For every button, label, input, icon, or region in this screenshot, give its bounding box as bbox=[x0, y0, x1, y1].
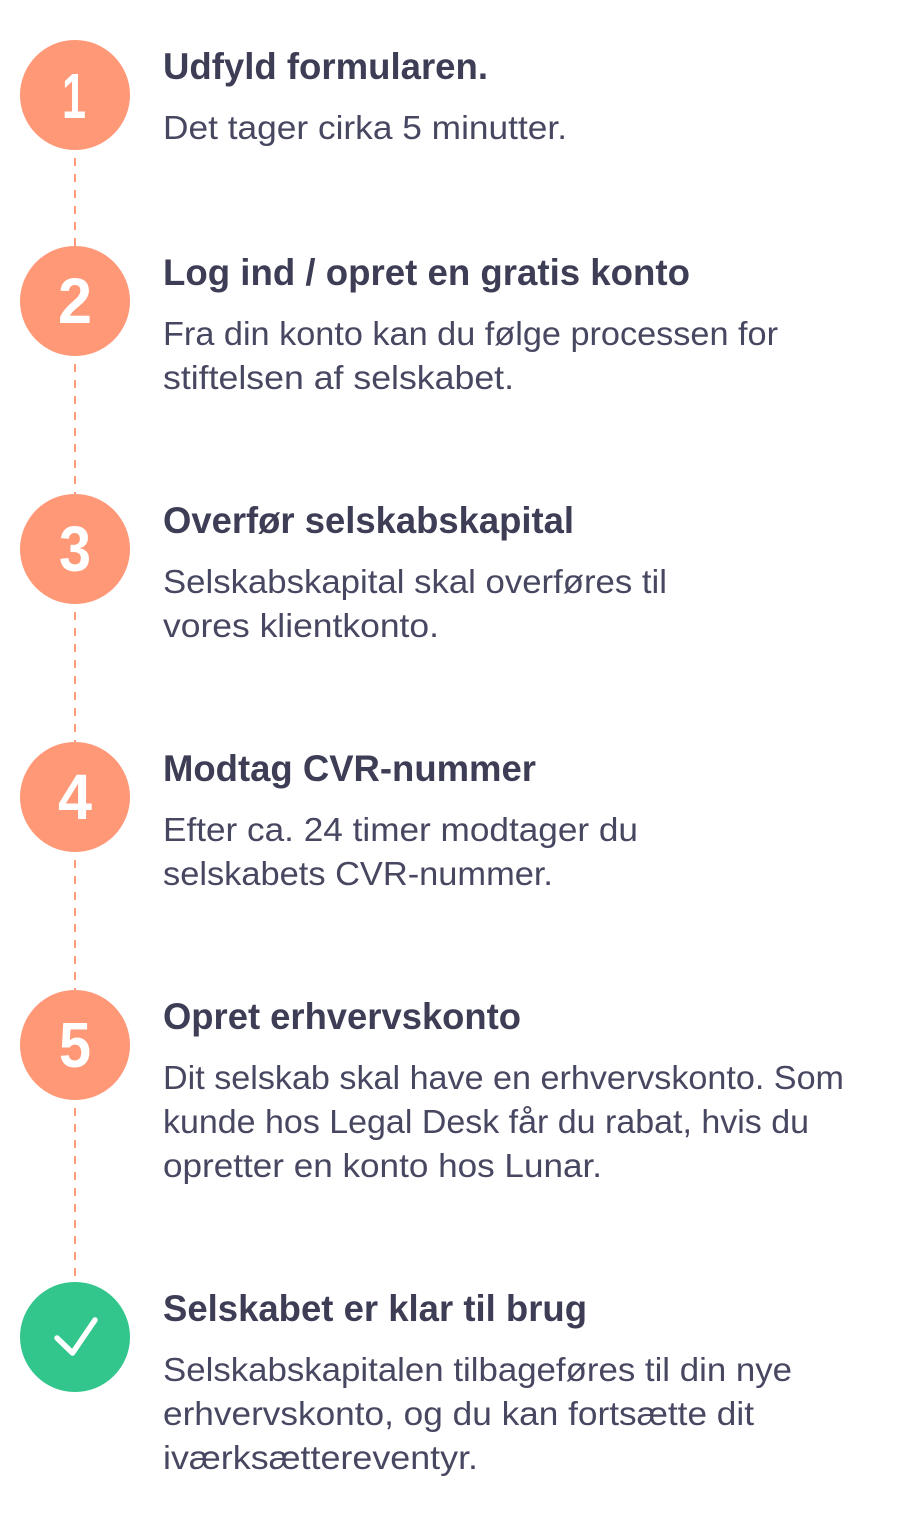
step 4 heading: Modtag CVR-nummer bbox=[163, 748, 536, 789]
step 5 body bbox=[163, 1059, 844, 1184]
step 2 body: Fra din konto kan du følge processen for bbox=[163, 315, 778, 352]
step 3 badge bbox=[20, 494, 130, 604]
icon: check badge bbox=[20, 1282, 130, 1392]
step 4 body bbox=[163, 811, 638, 892]
step 1 heading: Udfyld formularen. bbox=[163, 46, 488, 87]
step 1 badge bbox=[20, 40, 130, 150]
step 5 body: opretter en konto hos Lunar. bbox=[163, 1147, 602, 1184]
step 5 heading: Opret erhvervskonto bbox=[163, 996, 521, 1037]
step 4 badge bbox=[20, 742, 130, 852]
connector 2 to 3 bbox=[74, 364, 76, 494]
step 2 badge: 2 bbox=[58, 265, 92, 337]
final step body: erhvervskonto, og du kan fortsætte dit bbox=[163, 1395, 754, 1432]
final step body: Selskabskapitalen tilbageføres til din nye bbox=[163, 1351, 792, 1388]
step 4 badge: 4 bbox=[58, 761, 92, 833]
step 1 body: Det tager cirka 5 minutter. bbox=[163, 109, 567, 146]
step 1 bbox=[20, 40, 567, 150]
step 5 badge bbox=[20, 990, 130, 1100]
step 1 badge: 1 bbox=[62, 60, 86, 132]
connector 5 to done bbox=[74, 1108, 76, 1282]
step 2 body bbox=[163, 315, 778, 396]
step 5 body: Dit selskab skal have en erhvervskonto. Som bbox=[163, 1059, 844, 1096]
step 3 body bbox=[163, 563, 667, 644]
connector 1 to 2 bbox=[74, 158, 76, 246]
step 5 badge: 5 bbox=[59, 1009, 91, 1081]
step 4 bbox=[20, 742, 638, 892]
step 3 heading: Overfør selskabskapital bbox=[163, 500, 574, 541]
step 5 body: kunde hos Legal Desk får du rabat, hvis du bbox=[163, 1103, 809, 1140]
final step bbox=[20, 1282, 792, 1476]
step 3 badge: 3 bbox=[59, 513, 91, 585]
step 3 bbox=[20, 494, 667, 644]
step 2 heading: Log ind / opret en gratis konto bbox=[163, 252, 690, 293]
step 2 body: stiftelsen af selskabet. bbox=[163, 359, 514, 396]
step 3 body: vores klientkonto. bbox=[163, 607, 439, 644]
step 3 body: Selskabskapital skal overføres til bbox=[163, 563, 667, 600]
step 4 body: Efter ca. 24 timer modtager du bbox=[163, 811, 638, 848]
final step body bbox=[163, 1351, 792, 1476]
connector 3 to 4 bbox=[74, 612, 76, 742]
step 2 bbox=[20, 246, 778, 396]
final step body: iværksættereventyr. bbox=[163, 1439, 478, 1476]
step 2 badge bbox=[20, 246, 130, 356]
final step heading: Selskabet er klar til brug bbox=[163, 1288, 587, 1329]
step 4 body: selskabets CVR-nummer. bbox=[163, 855, 553, 892]
connector 4 to 5 bbox=[74, 860, 76, 990]
step 5 bbox=[20, 990, 844, 1184]
